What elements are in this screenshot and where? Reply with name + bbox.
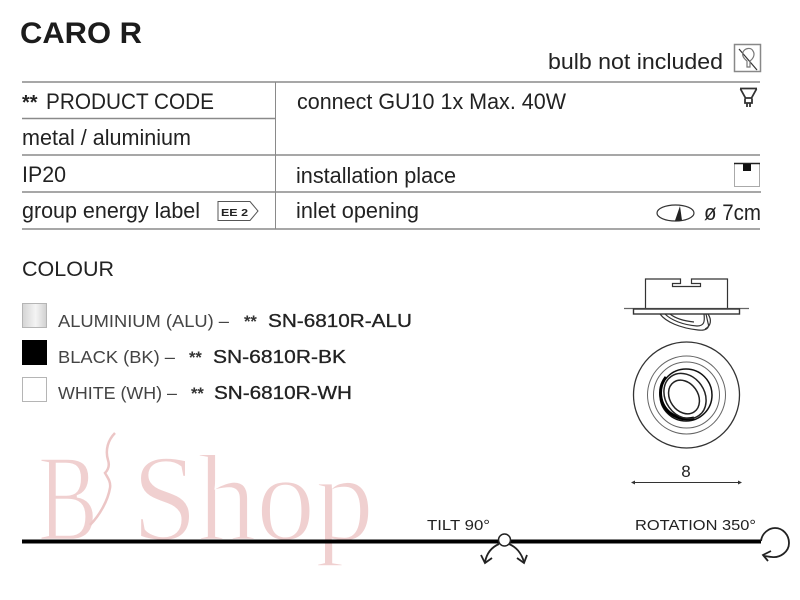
dimension: width 8: 8 (681, 462, 691, 481)
baseline bar (22, 540, 761, 544)
colour: white: ** (191, 385, 204, 403)
icon: inlet opening (657, 205, 694, 221)
rotation label: ROTATION 350° (635, 518, 756, 534)
title: CARO R (20, 17, 142, 50)
colour: black: SN-6810R-BK (213, 346, 347, 367)
bulb not included note: bulb not included (548, 49, 723, 74)
colour: black (22, 340, 347, 367)
connection spec: connect GU10 1x Max. 40W (297, 89, 566, 114)
inlet opening: inlet opening (296, 198, 419, 223)
icon: energy label tag (218, 202, 258, 220)
icon: rotation arrow (761, 528, 789, 561)
product code: PRODUCT CODE (46, 89, 214, 114)
colour: aluminium (22, 304, 412, 331)
colour: black: ** (189, 349, 202, 367)
dimension: width 8 (631, 462, 742, 484)
spec table (22, 82, 761, 229)
watermark: B'Shop: Shop (132, 430, 374, 567)
icon: ceiling installation (734, 164, 760, 186)
colour: black: BLACK (BK) – (58, 347, 175, 367)
energy label row: group energy label (22, 198, 200, 223)
protection rating: IP20 (22, 162, 66, 187)
watermark: B'Shop (38, 430, 374, 567)
colour: white: WHITE (WH) – (58, 383, 177, 403)
colour: aluminium: SN-6810R-ALU (268, 310, 412, 331)
icon: tilt arrows (481, 534, 527, 563)
product code: ** (22, 92, 38, 114)
material: metal / aluminium (22, 125, 191, 150)
product side view drawing (624, 279, 749, 330)
tilt label: TILT 90° (427, 518, 490, 534)
icon: GU10 bulb (740, 88, 757, 107)
icon: energy label tag: EE 2 (221, 207, 248, 219)
colour: aluminium: ALUMINIUM (ALU) – (58, 311, 229, 331)
installation place: installation place (296, 163, 456, 188)
icon: bulb crossed out (734, 44, 760, 72)
colour list (22, 304, 412, 403)
product front view drawing (634, 342, 740, 448)
colour: white (22, 378, 352, 403)
colour: white: SN-6810R-WH (214, 382, 352, 403)
bulb not included note (548, 44, 760, 74)
watermark: B'Shop: B (38, 430, 98, 567)
colour heading: COLOUR (22, 257, 114, 281)
inlet diameter: ø 7cm (704, 200, 761, 225)
colour: aluminium: ** (244, 313, 257, 331)
